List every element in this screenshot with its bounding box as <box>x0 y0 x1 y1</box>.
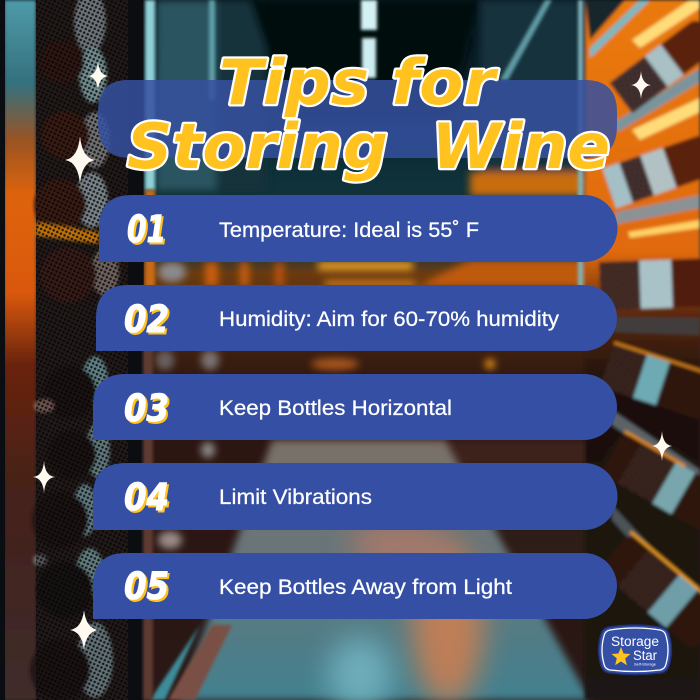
bottle 6 <box>598 531 700 651</box>
tip 5 <box>93 553 617 619</box>
tip 3: 03 <box>126 389 171 432</box>
tip 5: Keep Bottles Away from Light <box>219 576 512 599</box>
tip 4 <box>93 463 617 530</box>
tip 3: 03 <box>124 387 169 430</box>
rails <box>615 68 700 132</box>
floor <box>180 440 590 700</box>
tip 1: Temperature: Ideal is 55˚ F <box>219 219 479 242</box>
bottle 1 <box>610 17 700 113</box>
tip 1 <box>99 195 617 262</box>
bottle 4 <box>600 341 700 421</box>
tip 4: 04 <box>126 478 171 521</box>
tip 2: Humidity: Aim for 60-70% humidity <box>219 308 560 331</box>
sparkle stars <box>33 61 672 650</box>
title: Storing Wine <box>127 110 610 183</box>
title: Tips for <box>219 46 499 119</box>
tip 4: Limit Vibrations <box>219 486 372 509</box>
title <box>127 46 610 183</box>
logo: Storage Star: Storage <box>611 634 659 649</box>
tip 3 <box>93 374 617 440</box>
tip 5: 05 <box>126 567 171 610</box>
mesh rack <box>36 0 128 700</box>
bottle 3 <box>599 258 700 310</box>
streak lights <box>632 0 700 48</box>
bright ceiling light <box>209 0 552 100</box>
bottle 2 <box>602 133 700 208</box>
left column <box>4 0 36 700</box>
tip 2: 02 <box>126 300 171 343</box>
logo: Storage Star: Self-Storage <box>634 662 656 666</box>
right shelves: glow and bottles <box>578 0 700 700</box>
title panel <box>98 80 617 158</box>
tip 5: 05 <box>124 565 169 608</box>
tip 2 <box>96 285 617 351</box>
logo: Storage Star <box>598 625 672 674</box>
tip 2: 02 <box>124 298 169 341</box>
tip 1: 01 <box>129 210 168 253</box>
tip 3: Keep Bottles Horizontal <box>219 397 452 420</box>
tip 1: 01 <box>127 208 166 251</box>
left posts <box>128 0 144 700</box>
logo: Storage Star: Star <box>633 648 657 663</box>
tip 4: 04 <box>124 476 169 519</box>
bottle 5 <box>600 430 700 533</box>
